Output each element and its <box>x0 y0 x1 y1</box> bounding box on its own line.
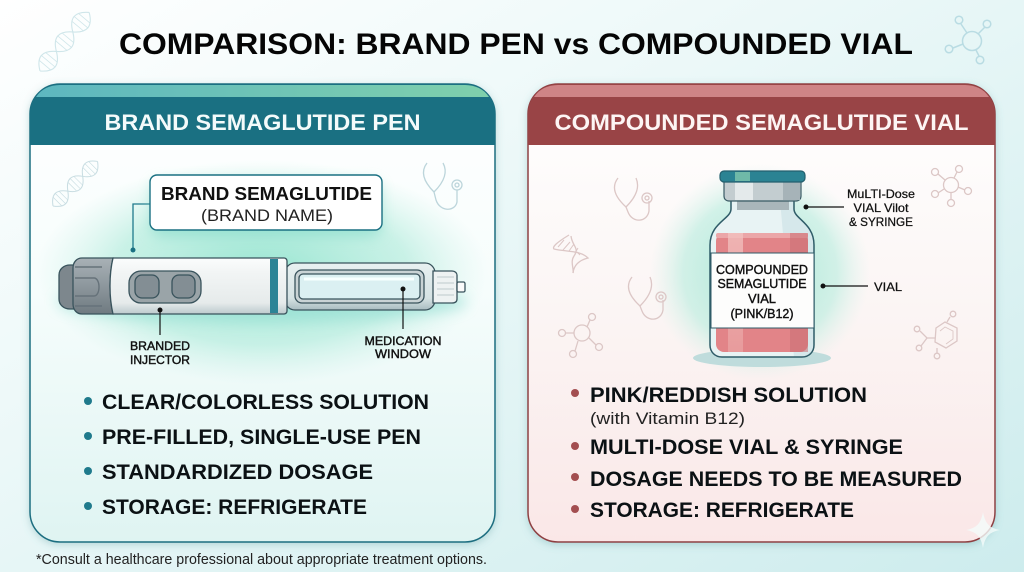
label: multi-dose vial: MuLTI-Dose <box>847 187 915 201</box>
list: brand pen features: PRE-FILLED, SINGLE-USE PEN <box>102 426 421 449</box>
icon: DNA <box>48 156 103 211</box>
pen glow <box>36 160 488 384</box>
title: COMPARISON: BRAND PEN vs COMPOUNDED VIAL <box>119 28 913 61</box>
list: compounded vial features: PINK/REDDISH SOLUTION <box>590 384 867 407</box>
label: multi-dose vial: & SYRINGE <box>849 215 913 229</box>
list: brand pen features: STORAGE: REFRIGERATE <box>102 496 367 519</box>
header: compounded vial <box>528 84 995 145</box>
label: multi-dose vial: VIAL Vilot <box>854 201 909 215</box>
panel: compounded vial <box>528 84 995 542</box>
icon: sparkle <box>966 512 1000 548</box>
callout: brand semaglutide: BRAND SEMAGLUTIDE <box>161 184 372 204</box>
list: compounded vial features <box>571 384 962 522</box>
label: branded injector: INJECTOR <box>130 355 190 367</box>
icon: stethoscope <box>423 163 462 209</box>
icon: DNA top left <box>33 6 96 77</box>
label: multi-dose vial <box>804 187 915 229</box>
callout: brand semaglutide <box>130 175 382 252</box>
vial label: COMPOUNDED <box>716 263 808 277</box>
header: compounded vial: COMPOUNDED SEMAGLUTIDE VIAL <box>554 110 968 135</box>
icon: molecule top right <box>945 16 991 64</box>
vial label <box>711 253 814 328</box>
list: compounded vial features: DOSAGE NEEDS TO BE MEASURED <box>590 468 962 491</box>
list: compounded vial features: (with Vitamin B12) <box>590 409 745 428</box>
label: branded injector: BRANDED <box>130 341 190 353</box>
vial label: (PINK/B12) <box>730 307 794 321</box>
callout: brand semaglutide: (BRAND NAME) <box>201 206 333 225</box>
label: vial <box>820 280 902 294</box>
vial glow <box>650 164 870 380</box>
footnote: *Consult a healthcare professional about appropriate treatment options. <box>36 552 487 568</box>
label: vial: VIAL <box>874 280 902 294</box>
label: medication window: MEDICATION <box>364 336 442 348</box>
illustration: injector pen <box>57 258 467 322</box>
illustration: vial <box>693 171 831 367</box>
list: brand pen features: STANDARDIZED DOSAGE <box>102 461 373 484</box>
vial label: VIAL <box>748 292 776 306</box>
list: brand pen features: CLEAR/COLORLESS SOLUTION <box>102 391 429 414</box>
header: brand pen: BRAND SEMAGLUTIDE PEN <box>104 110 420 135</box>
panel: brand pen <box>30 84 495 542</box>
decorative medical icons <box>554 166 972 359</box>
label: medication window: WINDOW <box>375 349 431 361</box>
label: branded injector <box>130 308 190 367</box>
vial label: SEMAGLUTIDE <box>718 277 806 291</box>
header: brand pen <box>30 84 495 145</box>
list: brand pen features <box>84 391 429 519</box>
list: compounded vial features: STORAGE: REFRIGERATE <box>590 499 854 522</box>
list: compounded vial features: MULTI-DOSE VIAL & SYRINGE <box>590 436 903 459</box>
label: medication window <box>364 286 442 361</box>
